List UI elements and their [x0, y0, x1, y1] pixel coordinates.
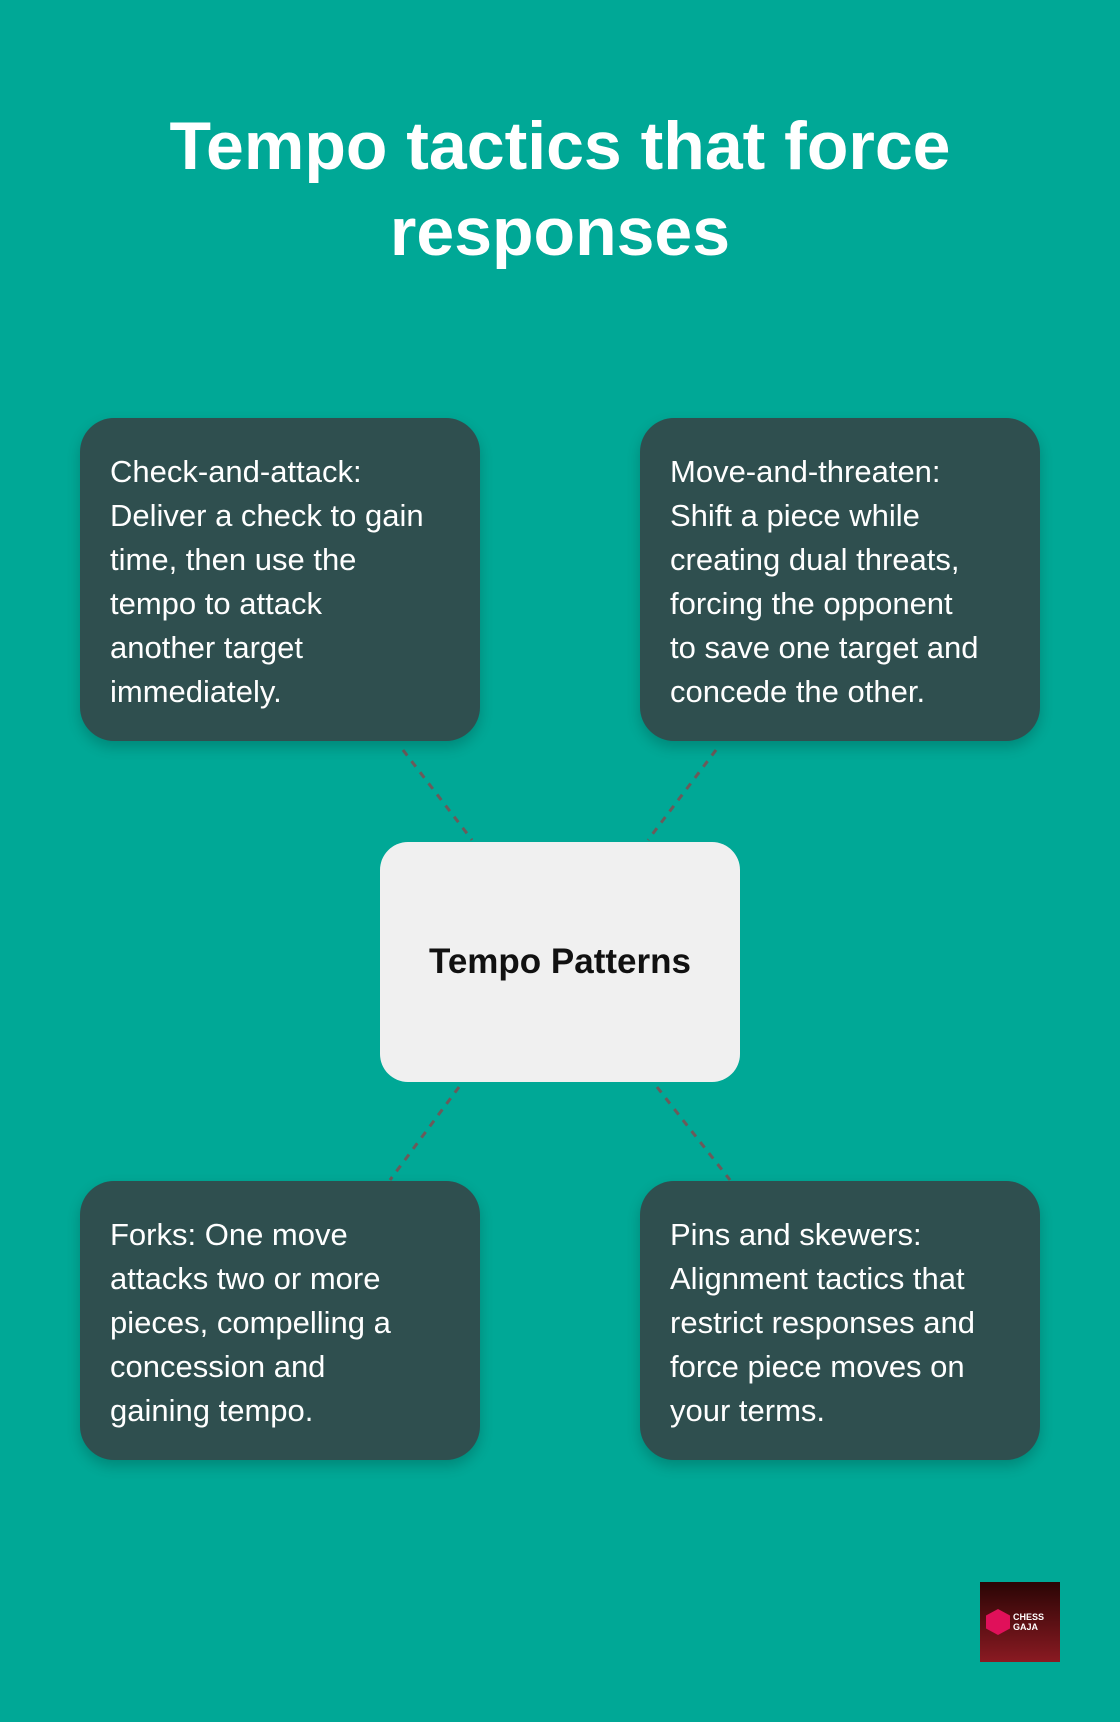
title: responses	[390, 194, 730, 270]
panel: forks: concession and	[110, 1349, 325, 1384]
panel: check-and-attack: tempo to attack	[110, 586, 322, 621]
panel: move-and-threaten: Shift a piece while	[670, 498, 920, 533]
panel: pins and skewers: Pins and skewers:	[670, 1217, 922, 1252]
panel: pins and skewers: force piece moves on	[670, 1349, 965, 1384]
panel: move-and-threaten: concede the other.	[670, 674, 925, 709]
center node: Tempo Patterns	[429, 942, 691, 981]
title: Tempo tactics that force	[170, 108, 950, 184]
panel: forks: Forks: One move	[110, 1217, 348, 1252]
logo	[980, 1582, 1060, 1662]
panel: pins and skewers: restrict responses and	[670, 1305, 975, 1340]
panel: pins and skewers: your terms.	[670, 1393, 825, 1428]
panel: forks: pieces, compelling a	[110, 1305, 391, 1340]
panel: check-and-attack: Deliver a check to gain	[110, 498, 424, 533]
panel: pins and skewers	[640, 1181, 1040, 1460]
title	[170, 108, 950, 270]
panel: check-and-attack: time, then use the	[110, 542, 356, 577]
panel: check-and-attack: immediately.	[110, 674, 282, 709]
panel: check-and-attack: Check-and-attack:	[110, 454, 362, 489]
panel: forks: gaining tempo.	[110, 1393, 313, 1428]
logo: CHESS	[1013, 1612, 1044, 1622]
panel: move-and-threaten: Move-and-threaten:	[670, 454, 941, 489]
center node	[380, 842, 740, 1082]
panel: forks: attacks two or more	[110, 1261, 380, 1296]
panel: move-and-threaten: creating dual threats,	[670, 542, 960, 577]
panel: move-and-threaten: forcing the opponent	[670, 586, 953, 621]
panel: check-and-attack	[80, 418, 480, 741]
panel: move-and-threaten	[640, 418, 1040, 741]
panel: check-and-attack: another target	[110, 630, 303, 665]
panel: forks	[80, 1181, 480, 1460]
logo: GAJA	[1013, 1622, 1038, 1632]
panel: move-and-threaten: to save one target and	[670, 630, 979, 665]
panel: pins and skewers: Alignment tactics that	[670, 1261, 965, 1296]
